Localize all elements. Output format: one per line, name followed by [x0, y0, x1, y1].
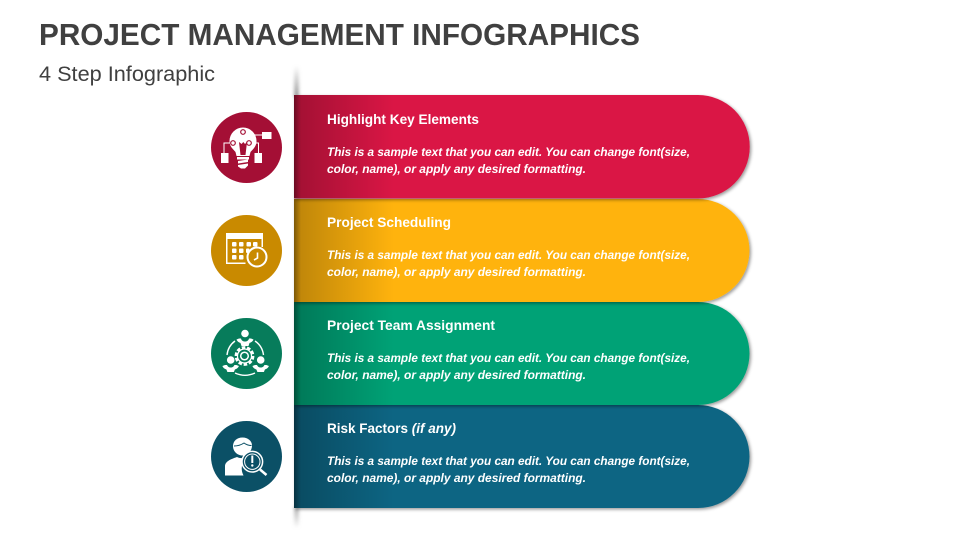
panel: highlight key elements — [294, 95, 750, 198]
text: project team body: color, name), or apply any desired formatting. — [327, 368, 586, 382]
panel: project scheduling — [294, 199, 749, 302]
text: risk factors body: This is a sample text that you can edit. You can change font(size, — [327, 454, 690, 468]
text: project scheduling body: This is a sample text that you can edit. You can change font(size, — [327, 248, 690, 262]
text: highlight body — [327, 145, 690, 176]
heading: risk factors: Risk Factors (if any) — [327, 420, 456, 436]
text: project team body: This is a sample text that you can edit. You can change font(size, — [327, 351, 690, 365]
icon: light bulb with elements — [211, 112, 282, 183]
vertical spine shadow — [294, 66, 299, 528]
icon: person with magnifier — [211, 421, 282, 492]
text: project team body — [327, 351, 690, 382]
panel: project team assignment — [294, 302, 750, 405]
heading: project scheduling: Project Scheduling — [327, 214, 451, 230]
subtitle: 4 Step Infographic — [39, 63, 215, 86]
text: risk factors body: color, name), or apply any desired formatting. — [327, 471, 586, 485]
title: PROJECT MANAGEMENT INFOGRAPHICS — [39, 18, 640, 52]
heading: highlight key elements: Highlight Key Elements — [327, 111, 479, 127]
text: highlight body: This is a sample text that you can edit. You can change font(size, — [327, 145, 690, 159]
icon: calendar and clock — [211, 215, 282, 286]
text: project scheduling body — [327, 248, 690, 279]
text: risk factors body — [327, 454, 690, 485]
panel: risk factors — [294, 405, 750, 508]
text: project scheduling body: color, name), or apply any desired formatting. — [327, 265, 586, 279]
text: highlight body: color, name), or apply any desired formatting. — [327, 162, 586, 176]
heading: project team assignment: Project Team Assignment — [327, 317, 495, 333]
icon: team around gear — [211, 318, 282, 389]
